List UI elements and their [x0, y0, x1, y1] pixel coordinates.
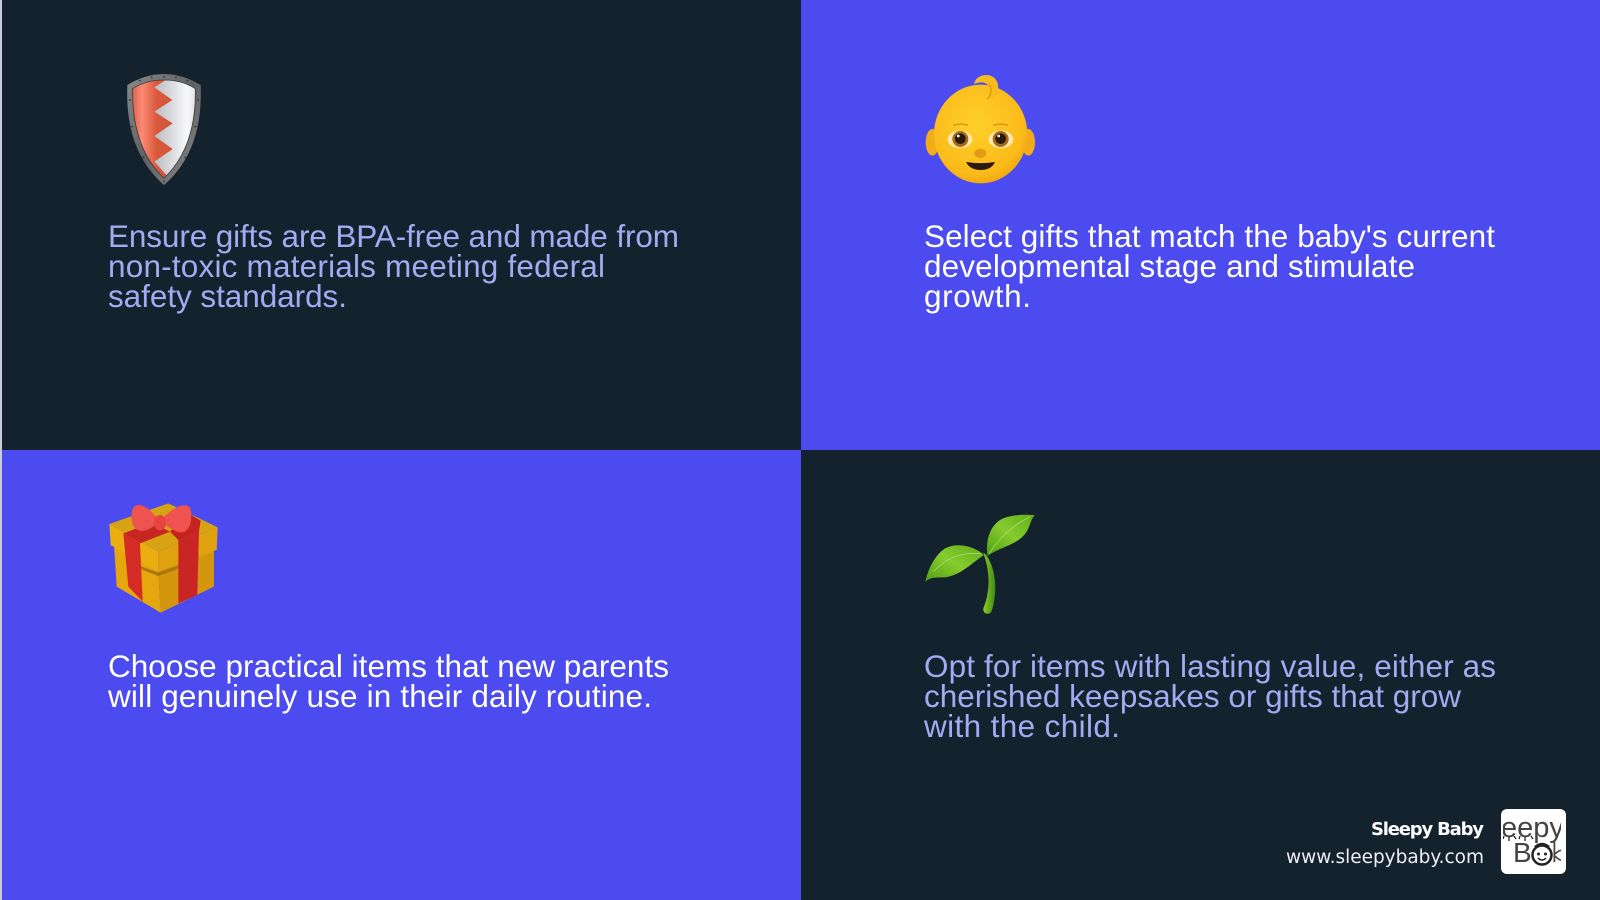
- text: development tip: Select gifts that match the baby's current: [924, 218, 1495, 254]
- text: lasting value tip: cherished keepsakes or gifts that grow: [924, 678, 1461, 714]
- panel: lasting value: [801, 450, 1600, 900]
- website: www.sleepybaby.com: [1286, 847, 1484, 868]
- text: practical tip: will genuinely use in their daily routine.: [107, 678, 652, 714]
- text: development tip: growth.: [924, 278, 1031, 314]
- text: safety tip: safety standards.: [108, 278, 347, 314]
- text: safety tip: non-toxic materials meeting federal: [108, 248, 605, 284]
- text: development tip: developmental stage and stimulate: [924, 248, 1415, 284]
- icon: baby face: [926, 75, 1035, 183]
- text: practical tip: Choose practical items that new parents: [108, 648, 669, 684]
- text: safety tip: Ensure gifts are BPA-free and made from: [108, 218, 679, 254]
- logo: [1501, 809, 1566, 874]
- icon: shield: [127, 74, 201, 185]
- brand name: Sleepy Baby: [1371, 819, 1484, 840]
- panel: development: [801, 0, 1600, 450]
- panel: safety: [2, 0, 801, 450]
- text: lasting value tip: with the child.: [923, 708, 1120, 744]
- text: lasting value tip: Opt for items with lasting value, either as: [924, 648, 1496, 684]
- logo: eepy: [1501, 812, 1564, 844]
- icon: seedling: [925, 515, 1035, 614]
- panel: practical: [2, 450, 801, 900]
- icon: gift box: [109, 503, 218, 613]
- logo: B: [1513, 837, 1532, 868]
